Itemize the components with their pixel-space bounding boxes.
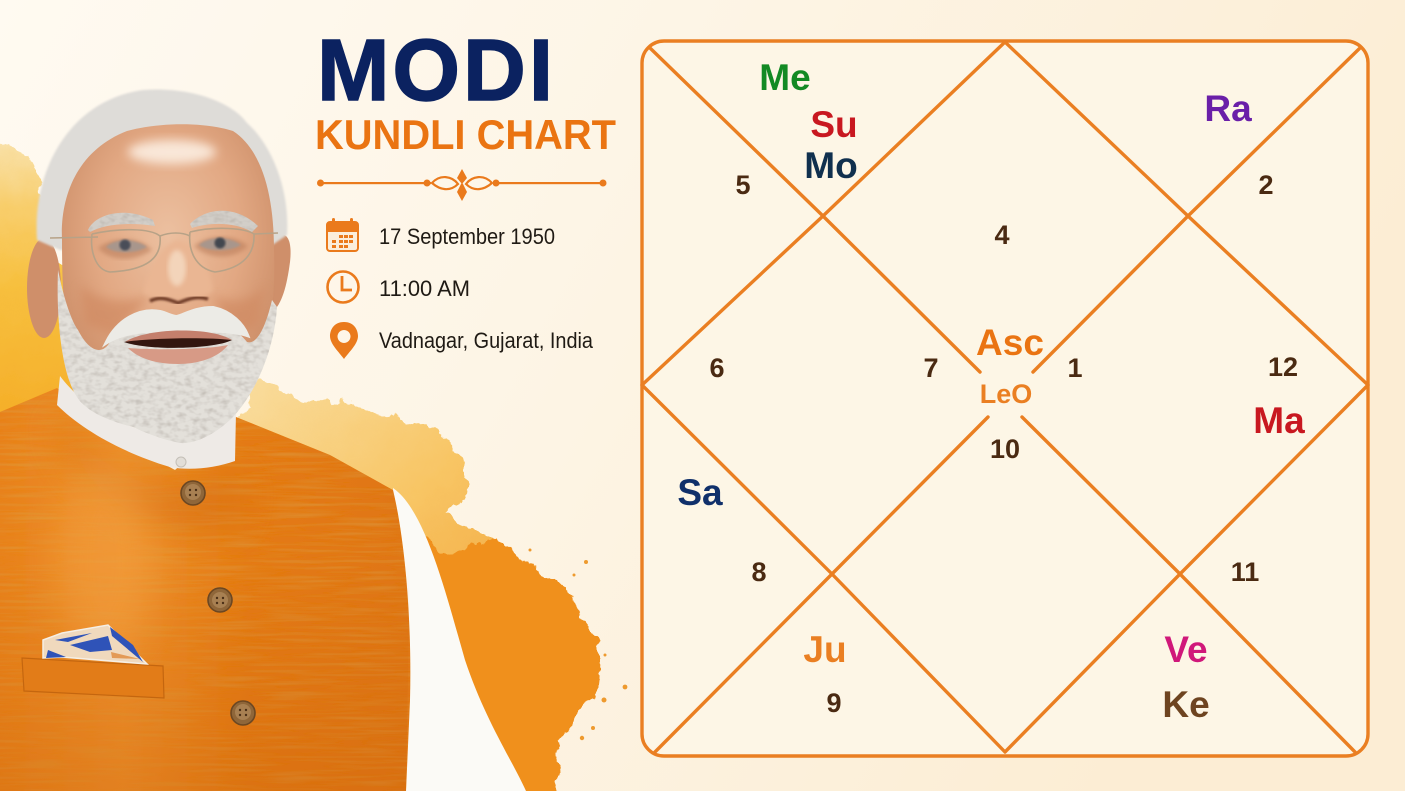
white kurta sleeve — [393, 488, 526, 791]
hair — [37, 89, 287, 250]
house number 12: 12 — [1268, 352, 1298, 382]
time: 11:00 AM — [379, 276, 470, 301]
house number 8: 8 — [751, 557, 767, 587]
vest pocket — [22, 658, 164, 698]
place: Vadnagar, Gujarat, India — [379, 328, 594, 353]
nostrils — [150, 298, 208, 303]
planet: Me: Me — [759, 57, 811, 98]
upper lip — [125, 330, 232, 344]
vest button 3 — [231, 701, 255, 725]
face — [62, 124, 274, 416]
collar button — [176, 457, 186, 467]
watercolor splash: dark orange — [420, 535, 602, 791]
house number 5: 5 — [735, 170, 751, 200]
house number 6: 6 — [709, 353, 725, 383]
house number 10: 10 — [990, 434, 1020, 464]
vest button 2 — [208, 588, 232, 612]
planet: Ju: Ju — [803, 629, 847, 670]
lower lip — [128, 345, 228, 364]
moustache — [107, 308, 247, 342]
right pupil — [214, 238, 226, 248]
pupils — [120, 240, 130, 250]
vest highlight — [55, 460, 155, 660]
watercolor splash: left — [0, 140, 80, 425]
house number 11: 11 — [1231, 557, 1259, 587]
planet: Ma: Ma — [1253, 400, 1305, 441]
planet: Ke: Ke — [1162, 684, 1210, 725]
planet: Mo: Mo — [804, 145, 858, 186]
chart frame and lines — [642, 41, 1368, 756]
date: 17 September 1950 — [379, 224, 555, 249]
forehead highlight — [128, 140, 216, 164]
icon: location pin — [330, 322, 358, 359]
house number 2: 2 — [1258, 170, 1274, 200]
eyes — [106, 238, 241, 252]
sign: Leo: LeO — [980, 379, 1032, 409]
left ear — [27, 238, 61, 338]
planet: Ve: Ve — [1164, 629, 1208, 670]
house number 7: 7 — [923, 353, 939, 383]
kundli chart — [642, 41, 1368, 756]
title: MODI: MODI — [317, 22, 553, 119]
house number 9: 9 — [826, 688, 842, 718]
nose — [143, 240, 213, 299]
planet: Su: Su — [810, 104, 858, 145]
ascendant: Asc — [976, 322, 1044, 363]
vest lower shading — [0, 560, 410, 791]
house number 1: 1 — [1067, 353, 1083, 383]
portrait — [0, 89, 526, 791]
right ear — [270, 234, 291, 312]
collar — [57, 376, 236, 469]
icon: clock — [328, 272, 358, 302]
planet: Ra: Ra — [1204, 88, 1252, 129]
ornamental divider — [317, 169, 606, 201]
eyebrows — [88, 211, 258, 232]
subtitle: KUNDLI CHART: KUNDLI CHART — [315, 111, 616, 158]
paint speckles — [528, 548, 627, 740]
house number 4: 4 — [994, 220, 1010, 250]
cheek warmth — [80, 285, 265, 335]
nose highlight — [168, 250, 186, 286]
watercolor splash: light band behind shoulder — [235, 380, 500, 600]
eye sockets — [98, 237, 248, 259]
planet: Sa: Sa — [677, 472, 723, 513]
pocket square — [43, 625, 147, 664]
glasses — [50, 228, 278, 272]
vest button 1 — [181, 481, 205, 505]
icon: calendar — [327, 218, 358, 251]
beard — [58, 270, 277, 443]
mouth dark line — [124, 338, 232, 348]
vest shading — [60, 410, 240, 527]
orange vest — [0, 388, 410, 791]
